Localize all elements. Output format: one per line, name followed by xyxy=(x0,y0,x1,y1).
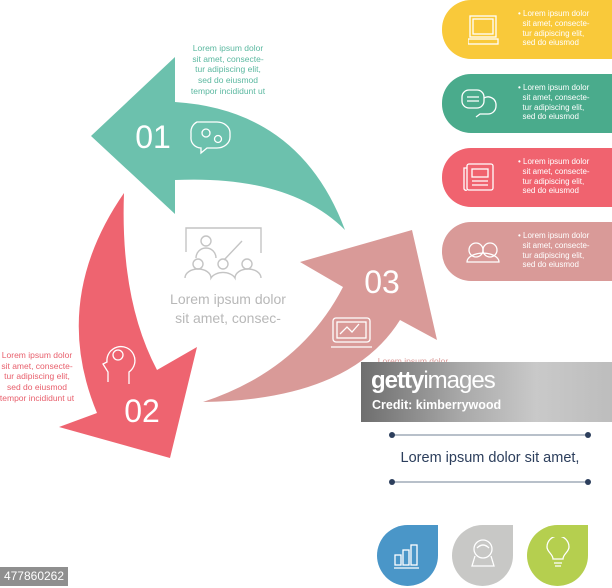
drop blue xyxy=(377,525,438,586)
watermark band: Credit: kimberrywood xyxy=(372,398,501,412)
pill pink: sed do eiusmod xyxy=(522,260,579,269)
text block 01: sit amet, consecte- xyxy=(192,54,264,64)
pill red: • Lorem ipsum dolor xyxy=(518,157,589,166)
arrow 03 pink xyxy=(203,230,437,402)
image id: 477860262 xyxy=(4,569,64,583)
text block 01: Lorem ipsum dolor xyxy=(193,43,263,53)
pill red: tur adipiscing elit, xyxy=(522,177,584,186)
arrow 01 teal xyxy=(91,57,345,230)
pill yellow: sed do eiusmod xyxy=(522,38,579,47)
text block 01: sed do eiusmod xyxy=(198,75,258,85)
pill pink xyxy=(442,222,612,281)
pill pink: sit amet, consecte- xyxy=(522,241,590,250)
text block 03: Lorem ipsum dolor xyxy=(378,356,448,366)
arrow 02 red xyxy=(59,193,197,458)
arrow 03 pink: 03 xyxy=(364,264,400,300)
arrow 02 red: 02 xyxy=(124,393,160,429)
text block 02: tempor incididunt ut xyxy=(0,393,74,403)
text block 01: tempor incididunt ut xyxy=(191,86,265,96)
pill green: • Lorem ipsum dolor xyxy=(518,83,589,92)
image id xyxy=(0,567,68,586)
center text xyxy=(170,291,286,326)
text block 02: sit amet, consecte- xyxy=(1,361,73,371)
center text: sit amet, consec- xyxy=(175,310,281,326)
pill yellow: tur adipiscing elit, xyxy=(522,29,584,38)
pill green xyxy=(442,74,612,133)
text block 02: sed do eiusmod xyxy=(7,382,67,392)
watermark band: gettyimages xyxy=(371,367,495,394)
drop gray xyxy=(452,525,513,586)
text block 02: tur adipiscing elit, xyxy=(4,371,70,381)
drop green xyxy=(527,525,588,586)
pill green: sed do eiusmod xyxy=(522,112,579,121)
pill green: sit amet, consecte- xyxy=(522,93,590,102)
pill green: tur adipiscing elit, xyxy=(522,103,584,112)
pill pink: • Lorem ipsum dolor xyxy=(518,231,589,240)
divider with caption xyxy=(389,432,591,485)
pill red: sit amet, consecte- xyxy=(522,167,590,176)
caption: Lorem ipsum dolor sit amet, xyxy=(401,450,579,466)
text block 01 xyxy=(191,43,266,96)
text block 01: tur adipiscing elit, xyxy=(195,64,261,74)
pill yellow xyxy=(442,0,612,59)
text block 02: Lorem ipsum dolor xyxy=(2,350,72,360)
pill pink: tur adipiscing elit, xyxy=(522,251,584,260)
pill yellow: • Lorem ipsum dolor xyxy=(518,9,589,18)
arrow 01 teal: 01 xyxy=(135,119,171,155)
pill red xyxy=(442,148,612,207)
watermark band xyxy=(361,362,612,422)
center icon: presentation xyxy=(185,228,261,278)
pill yellow: sit amet, consecte- xyxy=(522,19,590,28)
text block 02 xyxy=(0,350,74,403)
center text: Lorem ipsum dolor xyxy=(170,291,286,307)
pill red: sed do eiusmod xyxy=(522,186,579,195)
